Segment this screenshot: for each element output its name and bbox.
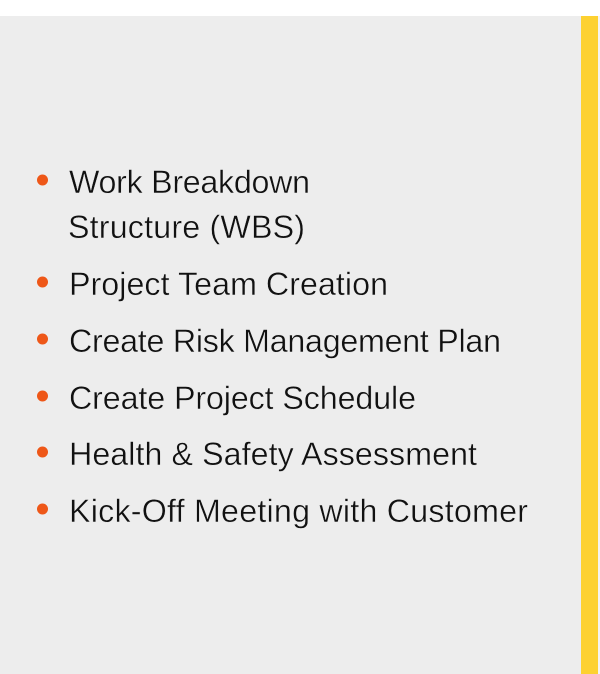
yellow accent bar (581, 16, 598, 674)
list item: Create Risk Management Plan: Create Risk Management Plan (69, 323, 501, 359)
list item: Health and Safety Assessment: Health & Safety Assessment (69, 436, 477, 472)
list item: Project Team Creation: Project Team Creation (69, 266, 388, 302)
list item: Create Project Schedule: Create Project Schedule (69, 380, 416, 416)
list item: Work Breakdown Structure: Work Breakdown (69, 164, 310, 200)
list item: Work Breakdown Structure (37, 164, 310, 245)
list item: Work Breakdown Structure: Structure (WBS) (68, 209, 305, 245)
bullet list (37, 164, 528, 529)
list item: Kick-Off Meeting with Customer: Kick-Off Meeting with Customer (69, 493, 528, 529)
